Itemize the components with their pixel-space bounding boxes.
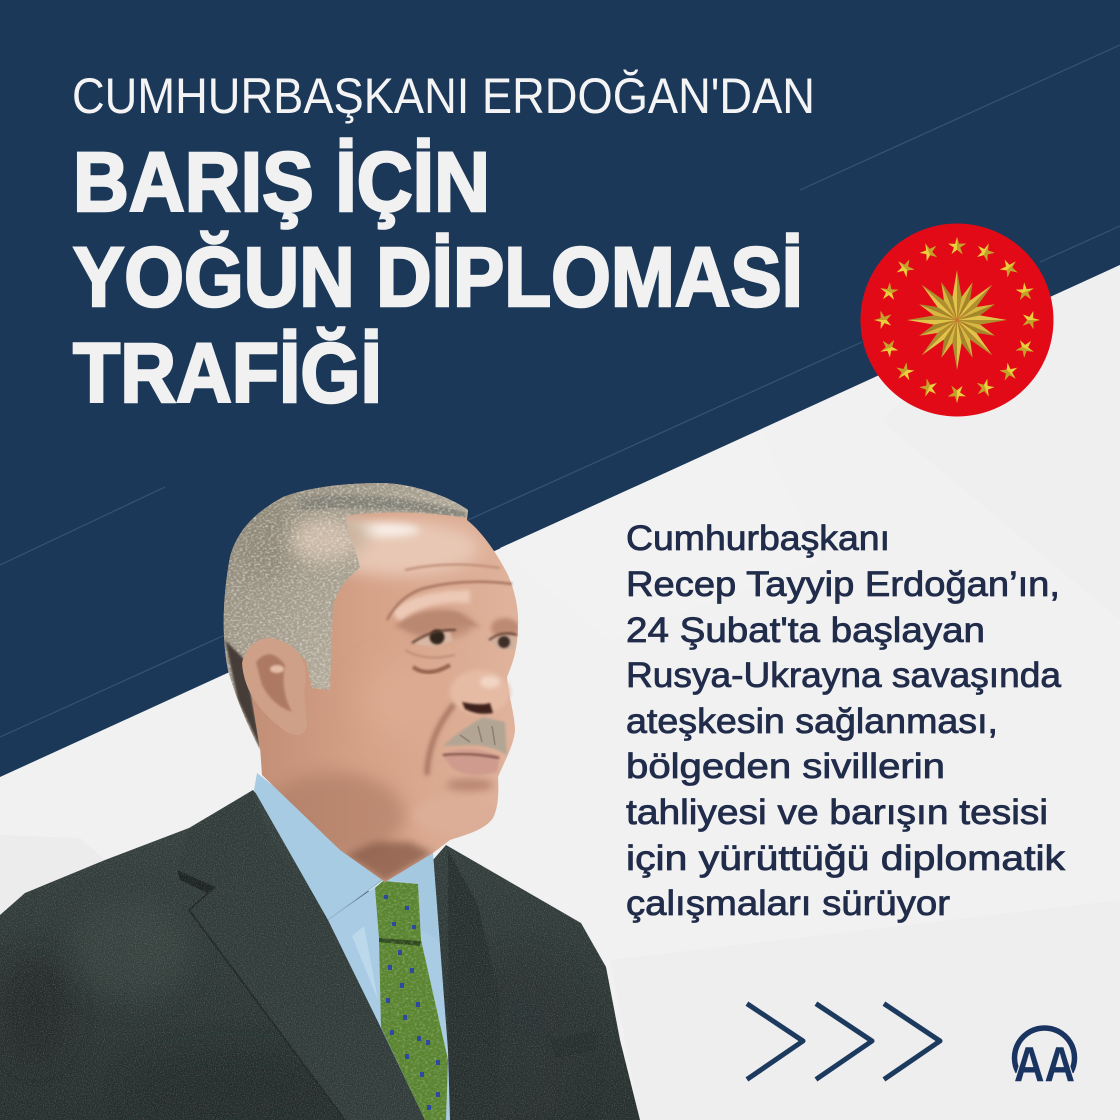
- body line 2: Recep Tayyip Erdoğan’ın,: [626, 565, 1060, 604]
- left lapel: [245, 790, 424, 1120]
- main title: [73, 135, 803, 420]
- ear: [242, 638, 307, 735]
- icon: AA agency logo: AA: [1014, 1038, 1075, 1092]
- body line 7: tahliyesi ve barışın tesisi: [626, 793, 1048, 832]
- head and neck: [220, 480, 519, 882]
- brow ridge light: [392, 590, 470, 622]
- shirt collar right: [385, 853, 438, 940]
- presidential emblem: [860, 224, 1054, 416]
- arrows: three chevrons: [749, 1005, 940, 1078]
- body line 4: Rusya-Ukrayna savaşında: [626, 656, 1062, 695]
- suit jacket: [0, 780, 640, 1120]
- neck shadow: [265, 773, 405, 857]
- eyes: [405, 630, 517, 672]
- body line 8: için yürüttüğü diplomatik: [626, 839, 1066, 878]
- title line 2: YOĞUN DİPLOMASİ: [73, 230, 803, 324]
- shirt collar left: [254, 773, 385, 920]
- body line 6: bölgeden sivillerin: [626, 747, 945, 786]
- forehead light: [320, 520, 480, 576]
- body line 3: 24 Şubat'ta başlayan: [626, 611, 985, 650]
- lips: [442, 749, 500, 775]
- scalp blend: [345, 514, 377, 556]
- central sunburst: [907, 270, 1007, 370]
- body line 5: ateşkesin sağlanması,: [626, 702, 998, 741]
- moustache: [443, 717, 507, 755]
- hair: [220, 480, 475, 760]
- subtitle: CUMHURBAŞKANI ERDOĞAN'DAN: [72, 68, 815, 124]
- body line 1: Cumhurbaşkanı: [626, 519, 890, 558]
- green tie: [375, 881, 448, 1120]
- body text: [626, 519, 1066, 923]
- eye sockets: [403, 611, 473, 639]
- title line 3: TRAFİĞİ: [73, 326, 382, 420]
- light diagonal panel: [0, 265, 1120, 1120]
- title line 1: BARIŞ İÇİN: [73, 135, 490, 229]
- nasolabial fold: [427, 703, 455, 775]
- shirt: [254, 773, 450, 1120]
- body line 9: çalışmaları sürüyor: [626, 884, 950, 923]
- brow and wrinkles: [387, 582, 512, 620]
- sixteen stars: [874, 237, 1040, 403]
- under lip shadow: [446, 779, 494, 791]
- portrait photo: [0, 480, 640, 1120]
- nose: [450, 670, 510, 714]
